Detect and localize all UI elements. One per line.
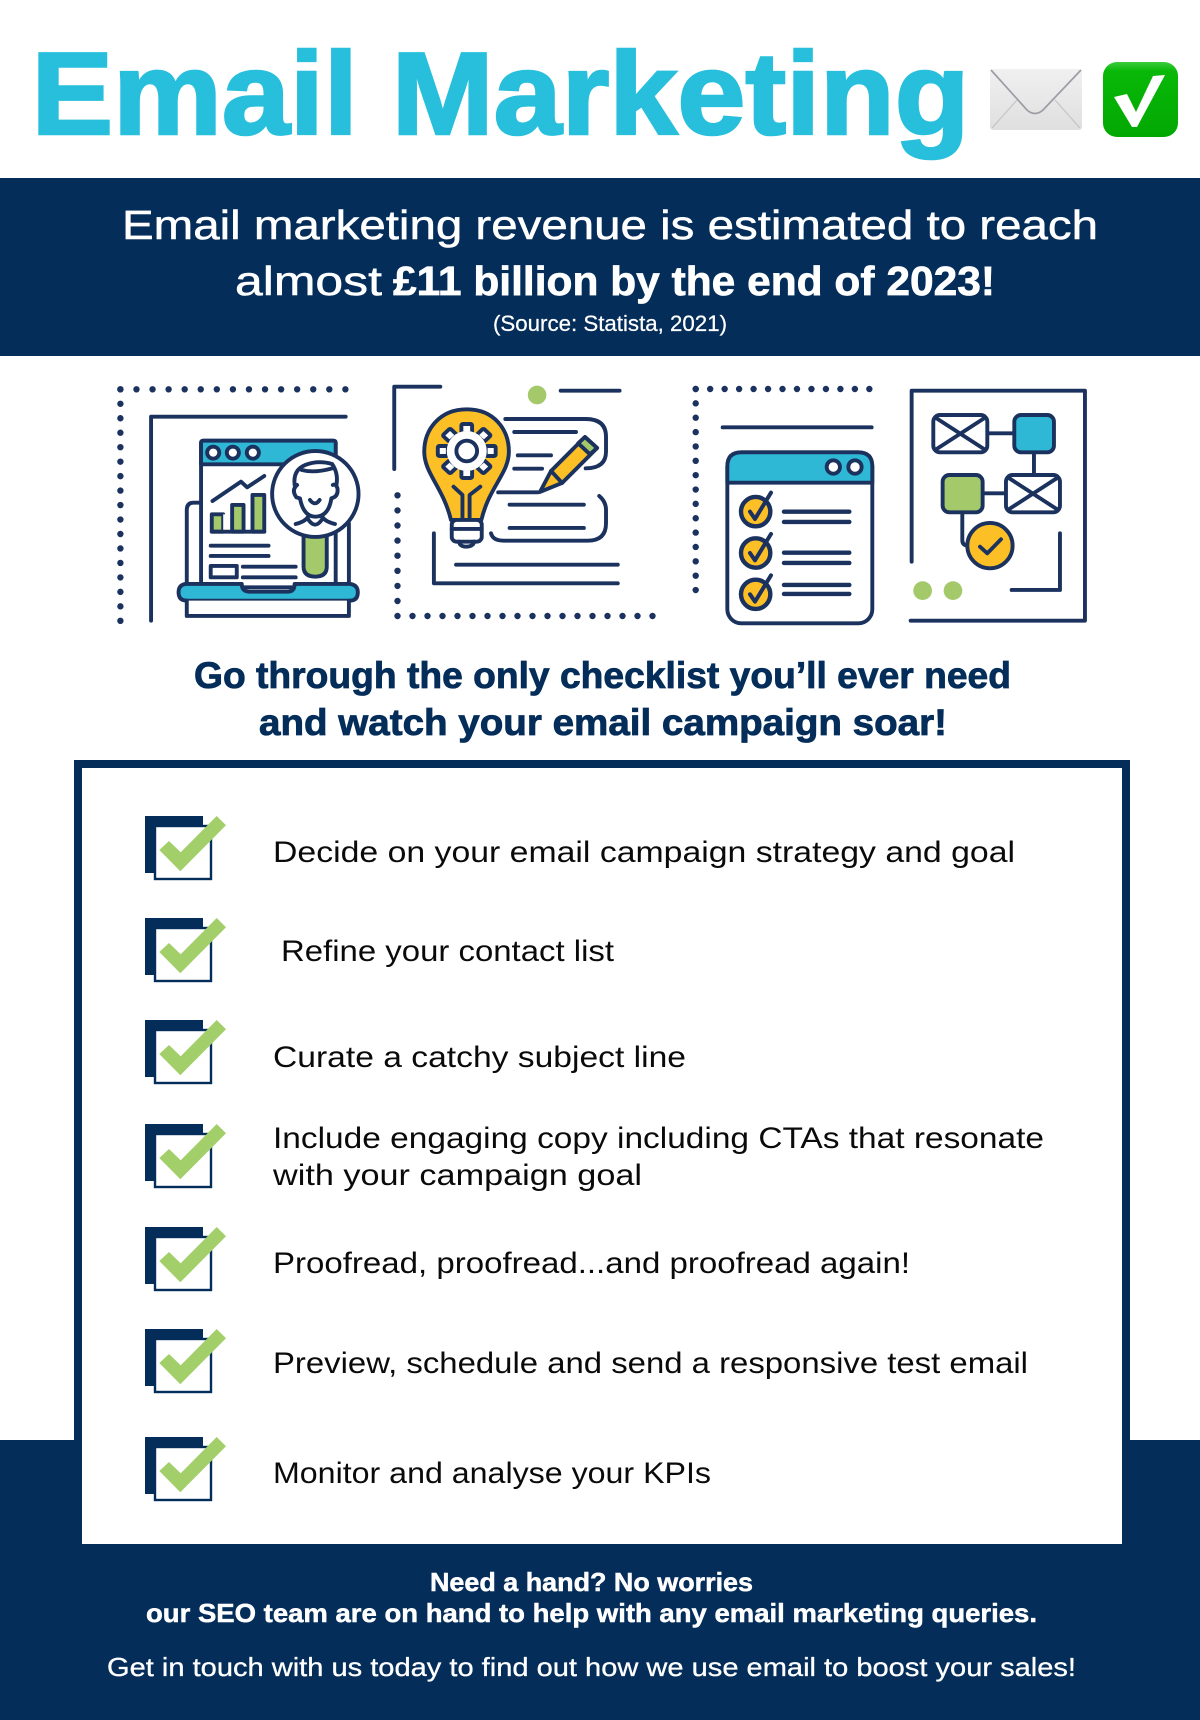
icon: envelope xyxy=(990,69,1082,130)
footer text xyxy=(107,1567,1076,1682)
checklist item 4: Include engaging copy including CTAs that resonate xyxy=(273,1122,1044,1155)
checklist item 3: Curate a catchy subject line xyxy=(273,1041,686,1074)
banner line one: Email marketing revenue is estimated to reach xyxy=(122,202,1098,248)
heading line two: and watch your email campaign soar! xyxy=(259,702,947,743)
banner line two lead: almost xyxy=(235,258,383,304)
banner line two bold: £11 billion by the end of 2023! xyxy=(393,258,995,304)
checklist item 5: Proofread, proofread...and proofread again! xyxy=(273,1247,910,1280)
checklist item 5 xyxy=(145,1227,910,1290)
dotted frame: first illustration xyxy=(120,389,346,622)
heading line one: Go through the only checklist you’ll ever need xyxy=(194,655,1011,696)
checklist item 6 xyxy=(145,1329,1028,1392)
illustration: email workflow diagram xyxy=(911,391,1085,621)
panel: checklist xyxy=(78,764,1126,1548)
source note: (Source: Statista, 2021) xyxy=(493,311,727,336)
footer line three: Get in touch with us today to find out how we use email to boost your sales! xyxy=(107,1652,1076,1682)
banner: revenue estimate xyxy=(0,178,1200,356)
illustration: lightbulb and pencil xyxy=(394,386,620,583)
illustration: checklist window xyxy=(723,427,872,623)
title: Email Marketing xyxy=(32,28,970,159)
checklist item 7: Monitor and analyse your KPIs xyxy=(273,1457,711,1490)
dotted frame: second illustration xyxy=(398,495,653,616)
checklist heading xyxy=(194,655,1011,743)
checklist item 4 xyxy=(145,1122,1044,1192)
dotted frame: third illustration xyxy=(696,389,870,591)
illustration: analytics browser with person xyxy=(151,417,359,621)
checklist item 3 xyxy=(145,1020,686,1083)
checklist item 6: Preview, schedule and send a responsive test email xyxy=(273,1347,1028,1380)
icon: green check box xyxy=(1103,62,1178,137)
footer line two: our SEO team are on hand to help with any email marketing queries. xyxy=(146,1598,1037,1628)
checklist item 2: Refine your contact list xyxy=(281,935,615,968)
checklist item 1: Decide on your email campaign strategy and goal xyxy=(273,836,1015,869)
checklist item 4: with your campaign goal xyxy=(272,1159,642,1192)
footer line one: Need a hand? No worries xyxy=(430,1567,753,1597)
checklist item 2 xyxy=(145,918,615,981)
footer band background xyxy=(0,1440,1200,1720)
checklist item 1 xyxy=(145,816,1015,879)
checklist item 7 xyxy=(145,1437,711,1500)
